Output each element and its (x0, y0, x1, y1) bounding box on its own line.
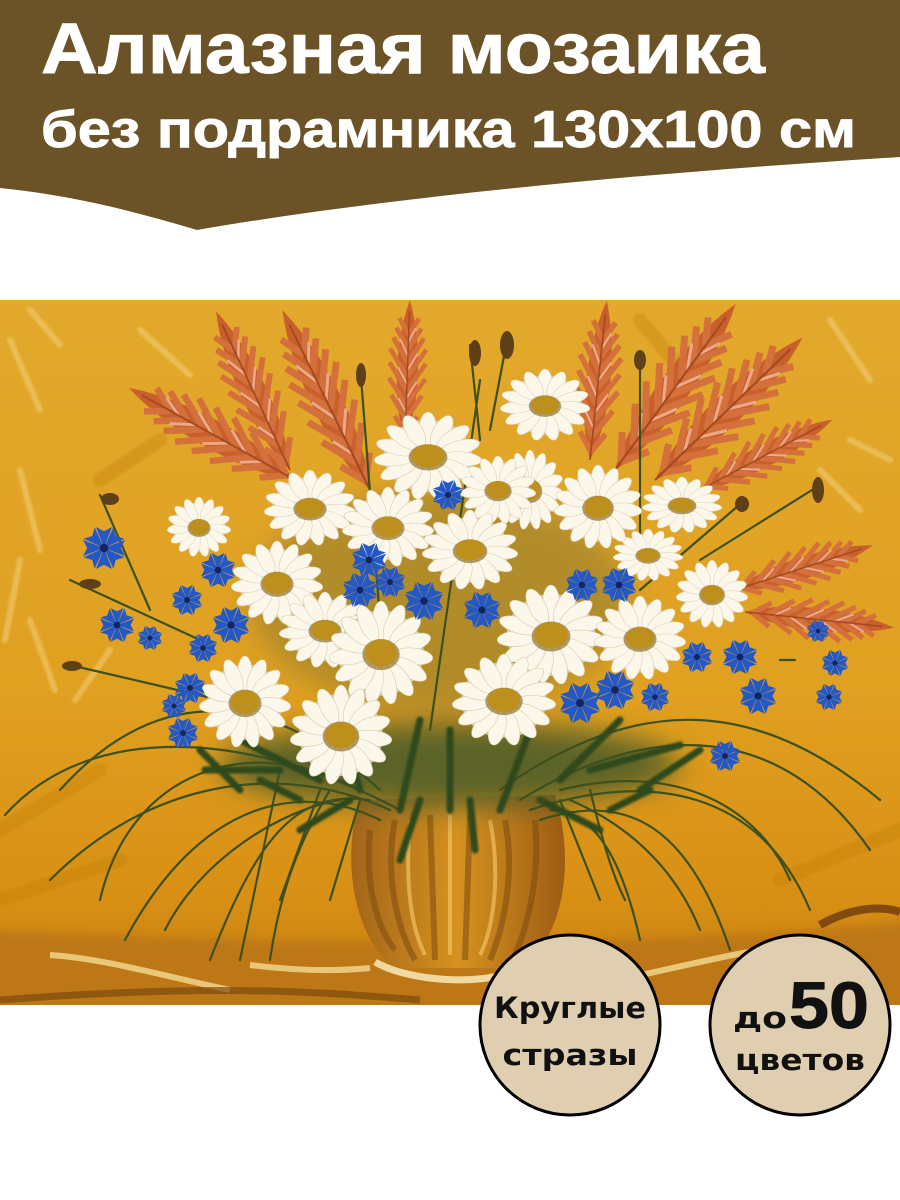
painting: flower bouquet in a vase (0, 288, 900, 1030)
cornflowers (83, 480, 848, 771)
subtitle: без подрамника 130х100 см (41, 101, 856, 159)
buds (62, 331, 824, 671)
badge: up to 50 colours: цветов (735, 1043, 865, 1077)
badge: up to 50 colours (710, 935, 890, 1115)
badge: up to 50 colours: 50 (789, 968, 869, 1042)
table surface (0, 904, 900, 1004)
badge: round rhinestones (480, 935, 660, 1115)
badge: up to 50 colours: до (733, 1001, 787, 1035)
title: Алмазная мозаика (41, 10, 766, 89)
bouquet shadow mass (220, 490, 680, 807)
header banner (0, 0, 900, 230)
orange feather grass (117, 288, 896, 647)
vase (351, 795, 565, 980)
green grass and stems (5, 335, 880, 960)
daisies (167, 369, 748, 786)
badge: round rhinestones: Круглые (494, 991, 646, 1025)
badge: round rhinestones: стразы (502, 1038, 638, 1072)
background brush strokes (0, 310, 900, 900)
